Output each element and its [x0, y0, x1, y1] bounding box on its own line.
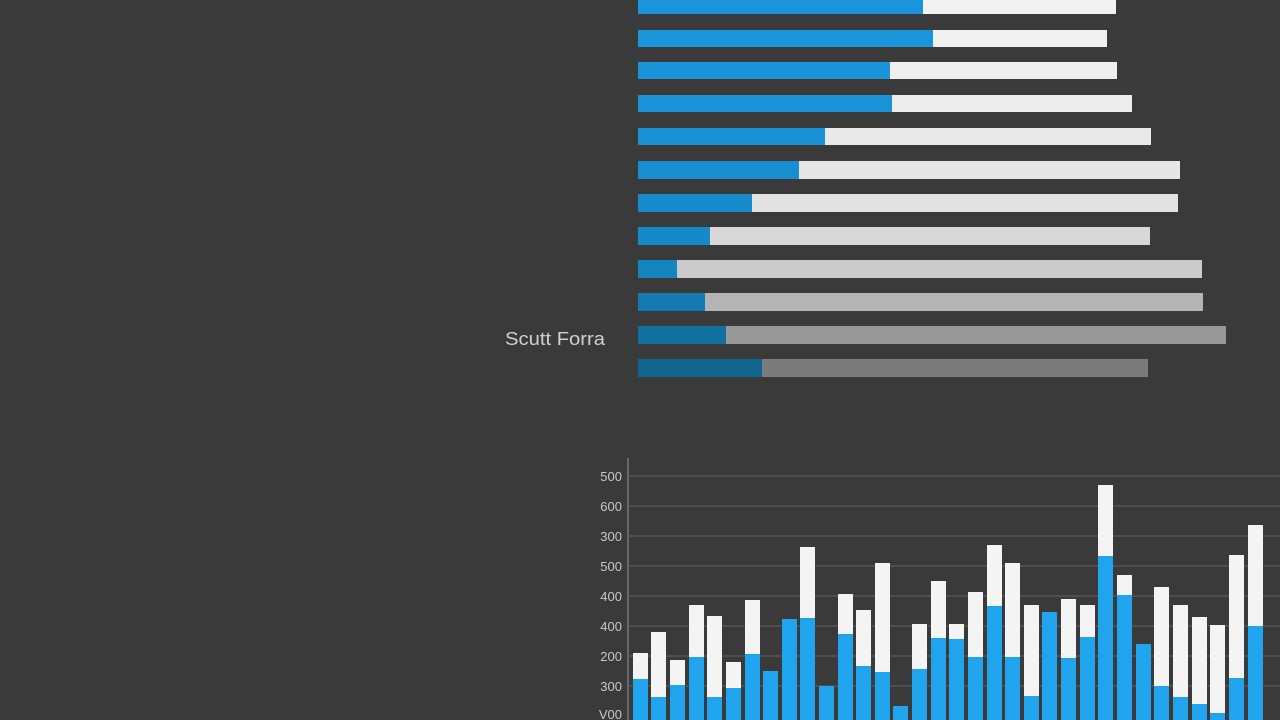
y-axis labels: 200 [600, 649, 622, 664]
y-axis labels: 300 [600, 529, 622, 544]
y-axis labels: 400 [600, 619, 622, 634]
y-axis labels: 500 [600, 559, 622, 574]
axis and grid [628, 458, 1280, 720]
y-axis labels: 600 [600, 499, 622, 514]
y-axis labels: 300 [600, 679, 622, 694]
y-axis labels: 500 [600, 469, 622, 484]
horizontal bar rows [638, 0, 1226, 377]
label: Scutt Forra: Scutt Forra [505, 329, 606, 349]
y-axis labels: 400 [600, 589, 622, 604]
columns [633, 485, 1263, 720]
y-axis labels [599, 469, 622, 720]
